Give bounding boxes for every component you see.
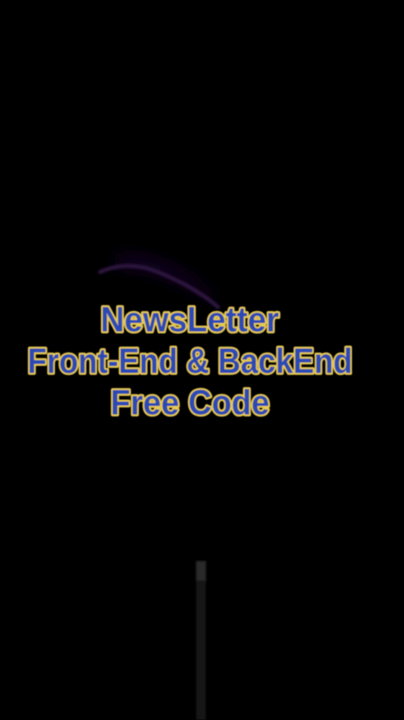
purple light streak <box>100 257 220 307</box>
vertical progress bar <box>196 561 206 720</box>
title line: Front-End & BackEnd: Front-End & BackEnd <box>28 342 352 381</box>
title line: Free Code: Free Code <box>110 384 270 422</box>
title line: NewsLetter: NewsLetter <box>100 300 279 340</box>
title text <box>28 300 352 422</box>
